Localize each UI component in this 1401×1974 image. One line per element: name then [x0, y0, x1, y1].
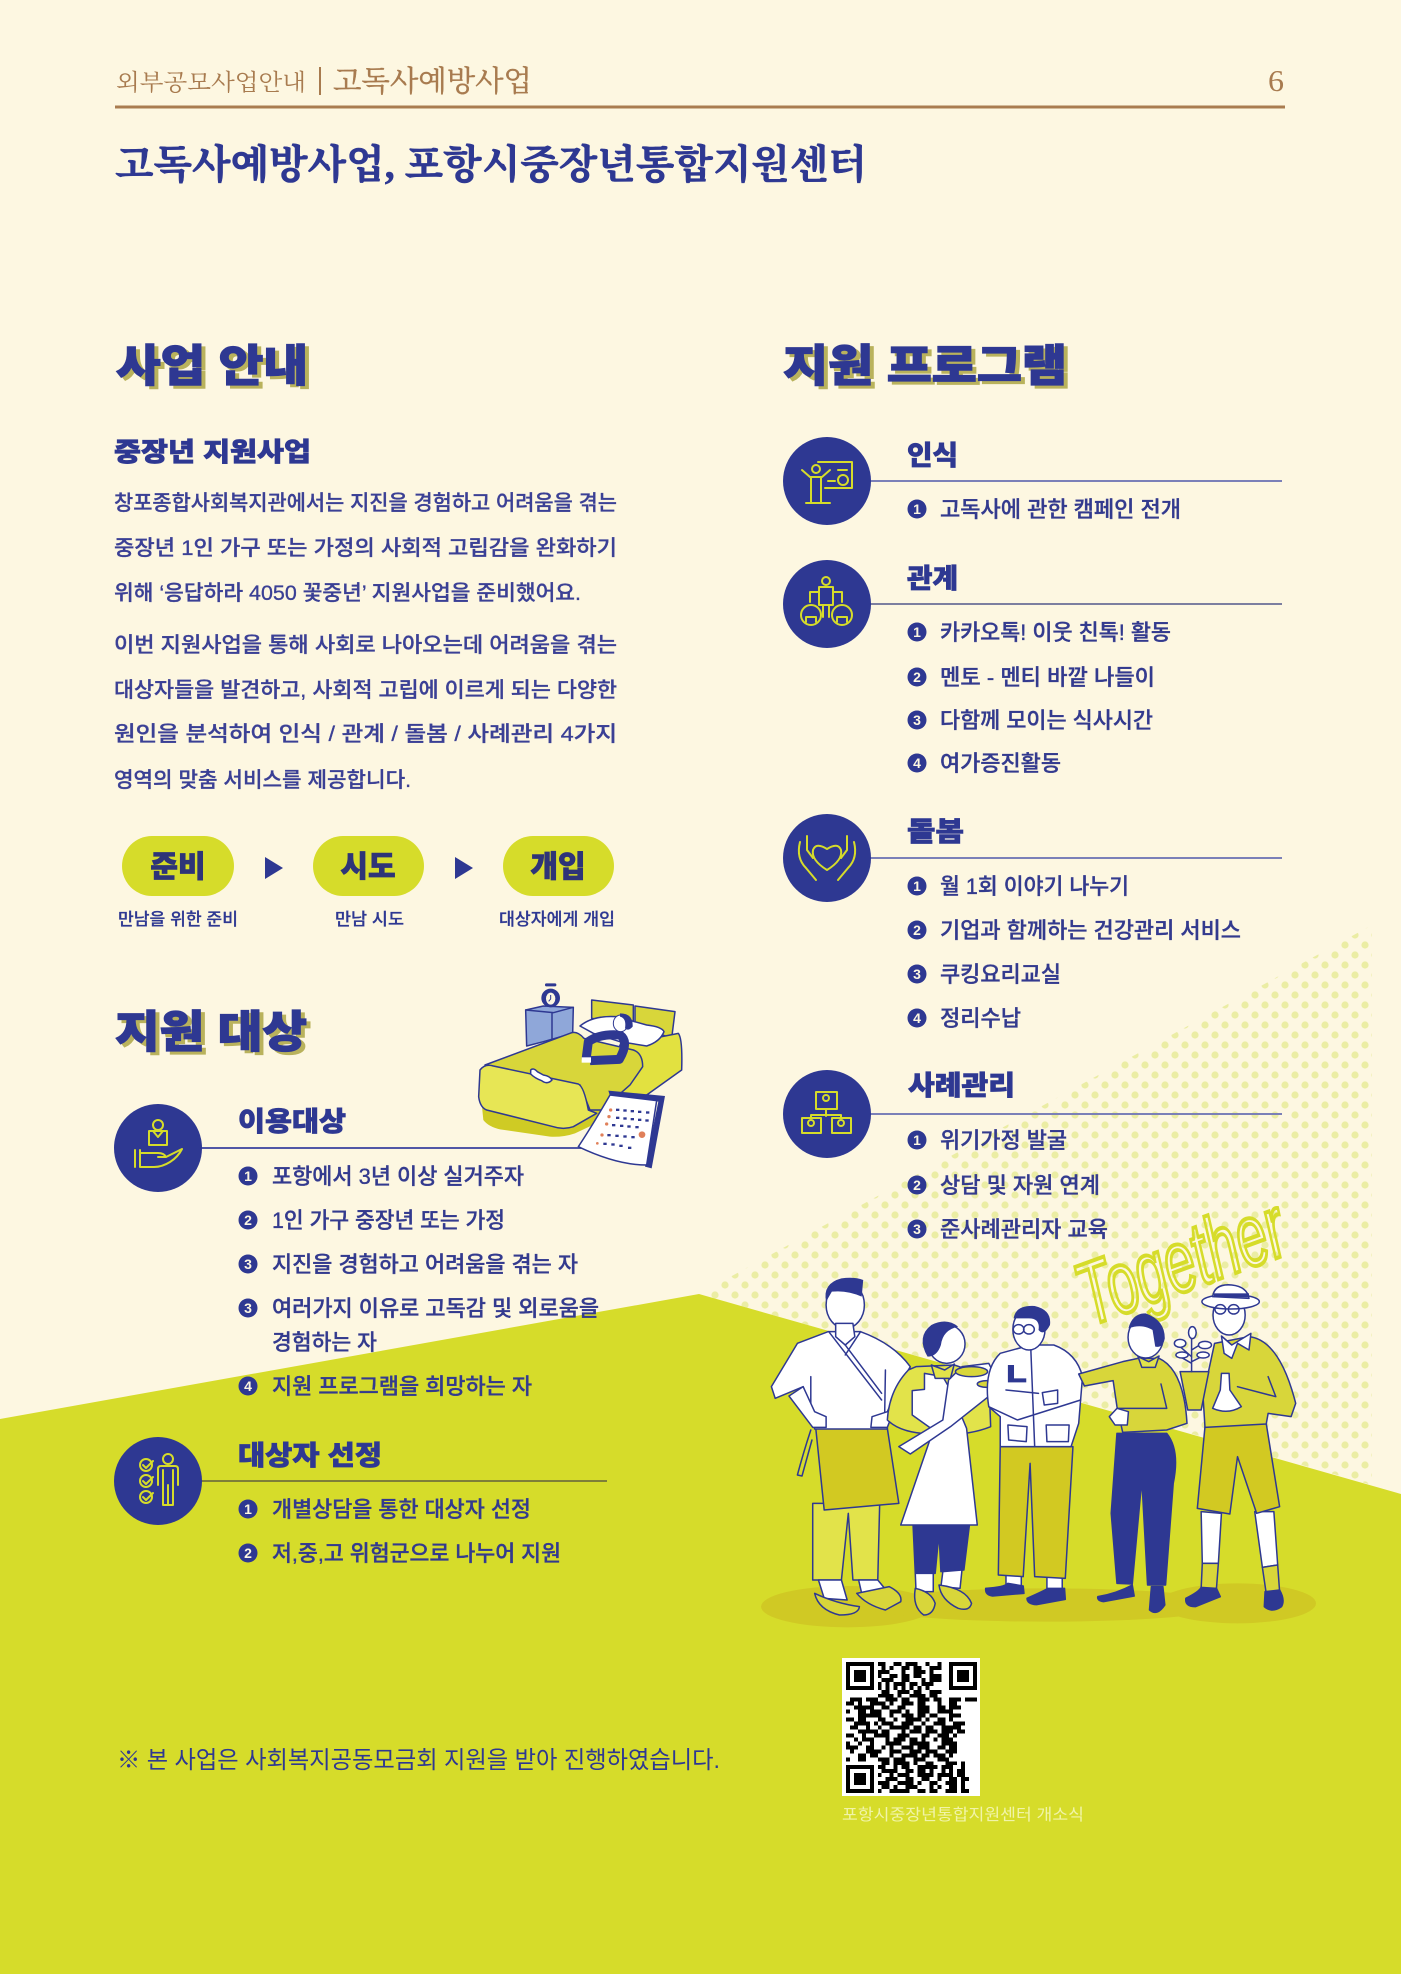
list: 대상자 선정 항목: 개별상담을 통한 대상자 선정 — [272, 1497, 531, 1522]
list: 관계 항목: 3 — [913, 712, 921, 728]
person 4: woman in navy trousers — [1079, 1313, 1187, 1612]
icon: checklist and person — [114, 1437, 202, 1525]
list: 대상자 선정 항목 — [238, 1497, 561, 1566]
icon: case management people — [783, 1070, 871, 1158]
list: 이용대상 항목: 지원 프로그램을 희망하는 자 — [272, 1374, 532, 1399]
list: 돌봄 항목: 2 — [913, 922, 921, 938]
QR caption: 포항시중장년통합지원센터 개소식 — [842, 1806, 1084, 1824]
section: 인식 — [783, 437, 1282, 525]
list: 사례관리 항목: 1 — [913, 1132, 921, 1148]
section: 돌봄 — [783, 814, 1282, 1031]
list: 이용대상 항목: 경험하는 자 — [272, 1330, 377, 1355]
feet — [531, 1069, 552, 1083]
list: 관계 항목: 4 — [913, 755, 921, 771]
list: 관계 항목: 다함께 모이는 식사시간 — [940, 708, 1153, 733]
heading: 대상자 선정: 대상자 선정 — [238, 1441, 382, 1471]
heading: 관계: 관계 — [907, 564, 958, 594]
illustration: five people group — [761, 1278, 1316, 1627]
section: 이용대상 — [114, 1104, 599, 1399]
step: 준비: 준비 — [150, 851, 206, 884]
background: dotted triangle — [699, 925, 1372, 1485]
text block: 사업 설명: 대상자들을 발견하고, 사회적 고립에 이르게 되는 다양한 — [114, 679, 617, 702]
arrow — [455, 857, 473, 879]
page header: 고독사예방사업 — [333, 65, 532, 98]
heading: 돌봄: 돌봄 — [907, 817, 964, 847]
icon: presenter at board — [783, 437, 871, 525]
list: 관계 항목: 카카오톡! 이웃 친톡! 활동 — [940, 620, 1171, 645]
list: 이용대상 항목: 3 — [244, 1256, 252, 1272]
list: 관계 항목: 2 — [913, 669, 921, 685]
blanket and mattress — [479, 1032, 643, 1128]
text block: 사업 설명: 영역의 맞춤 서비스를 제공합니다. — [114, 769, 411, 792]
title: 고독사예방사업, 포항시중장년통합지원센터 — [115, 142, 867, 187]
pillows and headboard — [580, 1000, 682, 1112]
QR code — [842, 1658, 980, 1796]
step: 준비: 만남을 위한 준비 — [118, 910, 238, 929]
divider line — [868, 603, 1282, 605]
step: 시도: 시도 — [340, 851, 396, 884]
list: 인식 항목: 1 — [913, 501, 921, 517]
page header: 외부공모사업안내 — [116, 70, 306, 95]
alarm clock — [541, 983, 560, 1007]
list: 관계 항목 — [908, 620, 1171, 776]
list: 이용대상 항목: 3 — [244, 1300, 252, 1316]
list: 관계 항목: 멘토 - 멘티 바깥 나들이 — [940, 665, 1155, 690]
illustration: person in bed with calendar — [479, 983, 682, 1168]
list: 돌봄 항목 — [908, 874, 1241, 1031]
icon: people network — [783, 560, 871, 648]
divider line — [200, 1147, 585, 1149]
footnote: ※ 본 사업은 사회복지공동모금회 지원을 받아 진행하였습니다. — [117, 1747, 720, 1774]
text block: 사업 설명: 이번 지원사업을 통해 사회로 나아오는데 어려움을 겪는 — [114, 634, 617, 657]
step: 준비 — [118, 836, 238, 929]
step: 시도 — [313, 836, 424, 929]
list: 이용대상 항목: 지진을 경험하고 어려움을 겪는 자 — [272, 1252, 578, 1277]
section: 사례관리 — [783, 1070, 1282, 1242]
heading: 지원 프로그램: 지원 프로그램 — [783, 342, 1067, 391]
list: 이용대상 항목: 2 — [244, 1212, 252, 1228]
heading: 지원 대상: 지원 대상 — [115, 1008, 307, 1057]
arrow — [265, 857, 283, 879]
heading: 사례관리: 사례관리 — [908, 1071, 1015, 1101]
step: 개입: 개입 — [530, 851, 586, 884]
list: 대상자 선정 항목: 2 — [244, 1545, 252, 1561]
list: 사례관리 항목: 2 — [913, 1177, 921, 1193]
list: 이용대상 항목: 1 — [244, 1168, 252, 1184]
list: 관계 항목: 여가증진활동 — [940, 751, 1061, 776]
divider line — [868, 480, 1282, 482]
sleeping person — [582, 1013, 633, 1063]
section: 관계 — [783, 560, 1282, 776]
bed base shadow — [482, 1103, 607, 1137]
divider line — [868, 1113, 1282, 1115]
list: 사례관리 항목: 위기가정 발굴 — [940, 1128, 1067, 1153]
list: 이용대상 항목: 4 — [244, 1378, 252, 1394]
list: 이용대상 항목: 여러가지 이유로 고독감 및 외로움을 — [272, 1296, 599, 1321]
icon: hands holding heart — [783, 814, 871, 902]
list: 이용대상 항목: 포항에서 3년 이상 실거주자 — [272, 1164, 524, 1189]
text block: 사업 설명: 창포종합사회복지관에서는 지진을 경험하고 어려움을 겪는 — [114, 492, 617, 515]
list: 돌봄 항목: 쿠킹요리교실 — [940, 962, 1061, 987]
step: 시도: 만남 시도 — [335, 910, 404, 929]
list: 사례관리 항목: 상담 및 자원 연계 — [940, 1173, 1100, 1198]
list: 돌봄 항목: 기업과 함께하는 건강관리 서비스 — [940, 918, 1241, 943]
list: 사례관리 항목: 3 — [913, 1221, 921, 1237]
page header: 6 — [1268, 63, 1284, 98]
panel: 사업 안내 본문 — [114, 437, 617, 792]
person 3: man with glasses and jacket — [986, 1306, 1083, 1605]
list: 돌봄 항목: 월 1회 이야기 나누기 — [940, 874, 1129, 899]
person 1: man with headband and apron — [771, 1278, 910, 1615]
icon: hand holding person — [114, 1104, 202, 1192]
calendar — [578, 1091, 665, 1168]
list: 돌봄 항목: 정리수납 — [940, 1006, 1021, 1031]
text block: 사업 설명 — [114, 492, 617, 792]
person 5: person with hat, plant and bottle — [1174, 1285, 1296, 1610]
person 2: woman with bouquet — [887, 1322, 997, 1615]
text block: 사업 설명: 위해 ‘응답하라 4050 꽃중년’ 지원사업을 준비했어요. — [114, 582, 581, 605]
list: 대상자 선정 항목: 1 — [244, 1501, 252, 1517]
divider line — [868, 857, 1282, 859]
text block: 사업 설명: 중장년 1인 가구 또는 가정의 사회적 고립감을 완화하기 — [114, 537, 617, 560]
list: 돌봄 항목: 4 — [913, 1010, 921, 1026]
subheading: 중장년 지원사업: 중장년 지원사업 — [114, 437, 311, 467]
list: 사례관리 항목 — [908, 1128, 1108, 1242]
heading: 사업 안내: 사업 안내 — [116, 342, 308, 391]
list: 이용대상 항목: 1인 가구 중장년 또는 가정 — [272, 1208, 505, 1233]
list: 인식 항목: 고독사에 관한 캠페인 전개 — [940, 497, 1181, 522]
list: 사례관리 항목: 준사례관리자 교육 — [940, 1217, 1108, 1242]
step: 개입: 대상자에게 개입 — [499, 910, 615, 929]
process flow: 준비 시도 개입 — [118, 836, 615, 929]
section: 대상자 선정 — [114, 1437, 607, 1566]
step: 개입 — [499, 836, 615, 929]
ground shadow — [761, 1583, 1316, 1627]
heading: 이용대상: 이용대상 — [238, 1107, 346, 1137]
divider line — [200, 1480, 607, 1482]
text block: 사업 설명: 원인을 분석하여 인식 / 관계 / 돌봄 / 사례관리 4가지 — [114, 723, 617, 746]
list: 돌봄 항목: 1 — [913, 878, 921, 894]
background: green lower area — [0, 1294, 1401, 1974]
page header — [115, 63, 1285, 108]
list: 대상자 선정 항목: 저,중,고 위험군으로 나누어 지원 — [272, 1541, 561, 1566]
list: 돌봄 항목: 3 — [913, 966, 921, 982]
heading: 인식: 인식 — [907, 441, 958, 471]
list: 관계 항목: 1 — [913, 624, 921, 640]
nightstand — [526, 1006, 573, 1046]
list: 이용대상 항목 — [238, 1164, 599, 1399]
